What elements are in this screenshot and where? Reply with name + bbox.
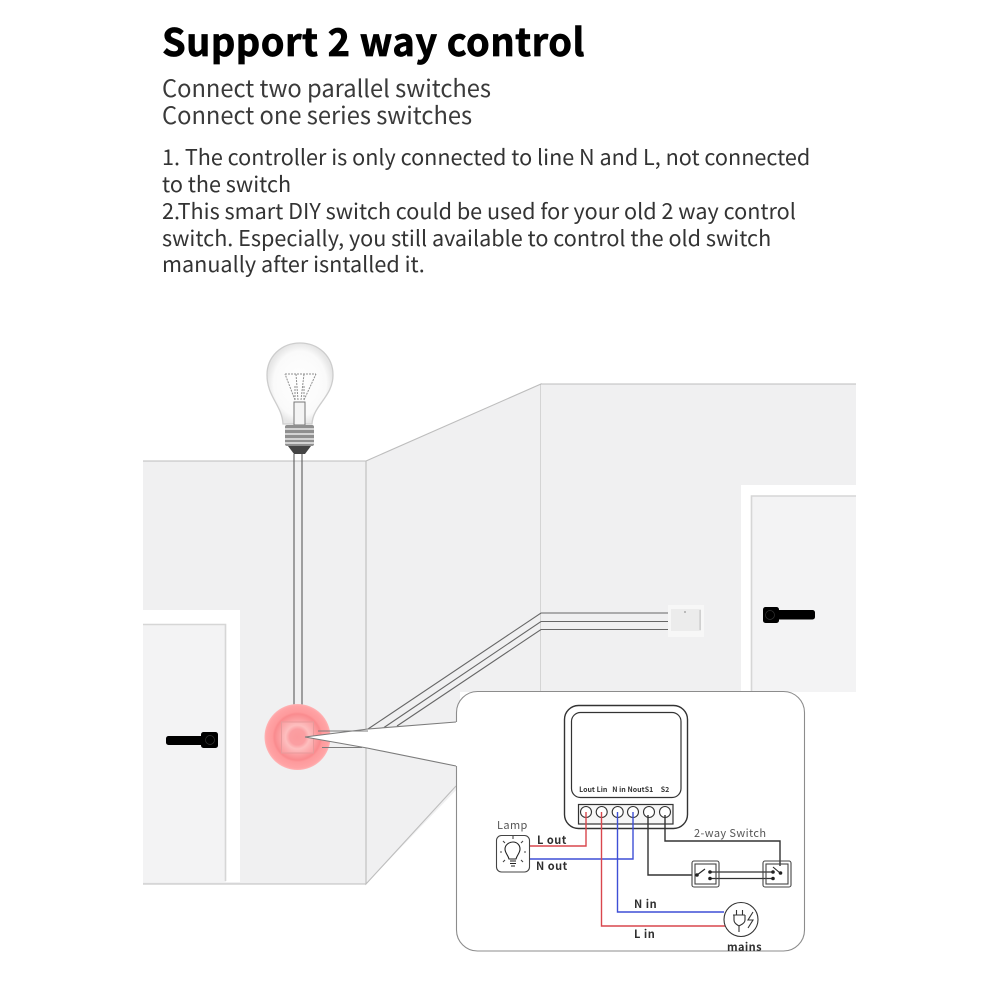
subtitle	[162, 70, 491, 130]
middle wall	[366, 384, 541, 884]
red pulse indicator	[264, 704, 330, 770]
wires	[529, 812, 780, 926]
terminal labels: Lout	[579, 785, 595, 795]
smart module	[564, 706, 688, 828]
subtitle: Connect two parallel switches	[162, 70, 491, 104]
wiring labels: L in	[634, 926, 655, 942]
wiring labels: mains	[727, 939, 762, 955]
wiring labels: Lamp	[497, 817, 528, 833]
wiring panel	[305, 692, 804, 955]
switch right	[763, 861, 791, 887]
wiring labels: N in	[634, 896, 657, 912]
wiring labels	[497, 817, 766, 955]
terminal labels: S1	[645, 785, 653, 795]
lamp icon	[496, 836, 530, 872]
left door	[143, 610, 240, 882]
wires from bulb	[294, 454, 302, 724]
terminal labels: Lin	[597, 785, 607, 795]
description text: to the switch	[162, 168, 291, 199]
terminal labels	[579, 785, 669, 795]
mains icon	[724, 902, 758, 936]
terminal labels: S2	[661, 785, 669, 795]
terminal labels: N in	[612, 785, 626, 795]
wiring labels: L out	[537, 832, 567, 848]
description text: 1. The controller is only connected to line N and L, not connected	[162, 141, 810, 172]
bulb	[267, 343, 333, 454]
description text	[162, 141, 810, 279]
left wall	[143, 461, 366, 884]
wiring labels: N out	[536, 858, 568, 874]
switch left	[692, 861, 719, 887]
door handle right	[763, 607, 815, 623]
description text: switch. Especially, you still available to control the old switch	[162, 222, 771, 253]
right door	[741, 485, 856, 692]
title: Support 2 way control	[162, 12, 585, 67]
wiring labels: 2-way Switch	[694, 825, 766, 841]
terminal labels: Nout	[627, 785, 645, 795]
subtitle: Connect one series switches	[162, 96, 472, 130]
door handle left	[166, 732, 218, 748]
wires to wall switch	[368, 613, 668, 729]
description text: 2.This smart DIY switch could be used for your old 2 way control	[162, 195, 796, 226]
wall switch	[668, 605, 704, 637]
right wall	[541, 384, 856, 692]
callout wedge	[305, 722, 460, 766]
description text: manually after isntalled it.	[162, 248, 425, 279]
